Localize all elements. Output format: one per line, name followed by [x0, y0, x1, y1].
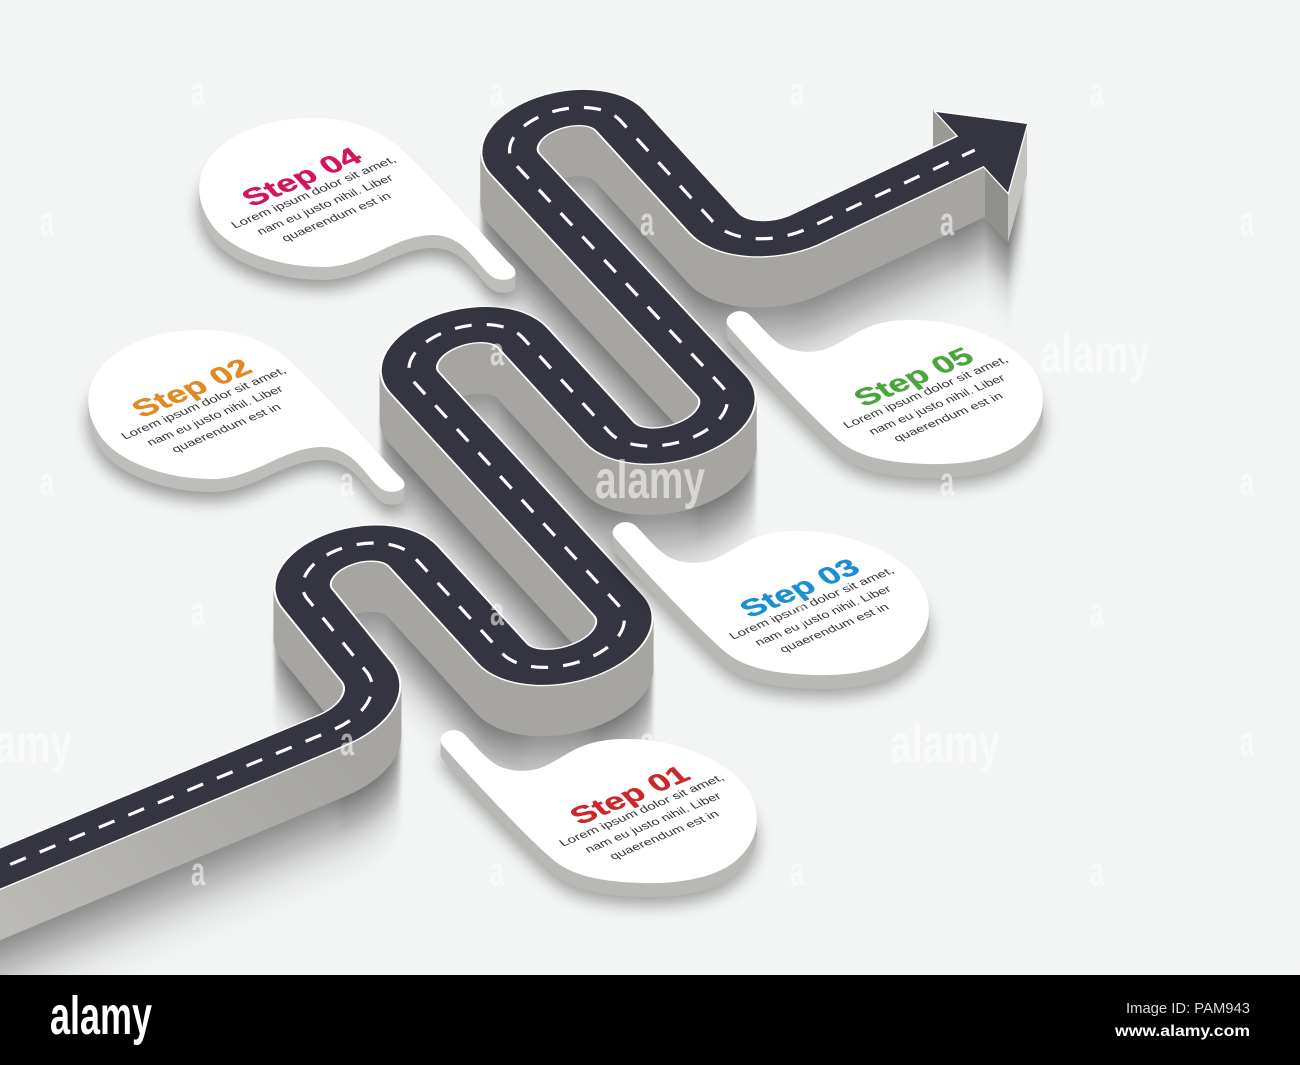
callout: step 03: Lorem ipsum dolor sit amet, — [726, 565, 897, 642]
watermarks: a — [640, 200, 654, 244]
callout: step 04 — [199, 118, 515, 302]
callout: step 03: nam eu justo nihil. Liber — [752, 583, 894, 648]
watermarks: a — [40, 200, 54, 244]
watermarks: a — [790, 70, 804, 114]
watermarks: a — [191, 330, 205, 374]
watermarks: a — [490, 850, 504, 894]
callout: step 01: quaerendum est in — [606, 808, 722, 862]
watermarks: a — [1240, 200, 1254, 244]
callout: step 01: Step 01 — [563, 760, 696, 830]
watermarks: a — [1090, 70, 1104, 114]
callout: step 02: Step 02 — [125, 353, 258, 423]
callout: step 02: quaerendum est in — [168, 401, 284, 455]
callout: step 02: Lorem ipsum dolor sit amet, — [118, 365, 289, 442]
callout: step 05: quaerendum est in — [890, 390, 1006, 444]
watermarks: a — [490, 70, 504, 114]
watermarks — [0, 70, 1254, 894]
callout: step 05: Step 05 — [847, 342, 980, 412]
callout: step 04: Step 04 — [235, 142, 368, 212]
watermarks: a — [1240, 460, 1254, 504]
footer bar — [0, 975, 1300, 1065]
watermarks: a — [490, 330, 504, 374]
watermarks: a — [1090, 590, 1104, 634]
callout: step 05: Lorem ipsum dolor sit amet, — [840, 354, 1011, 431]
watermarks: alamy — [595, 450, 705, 510]
callout: step 05 — [727, 311, 1043, 486]
callout: step 01: nam eu justo nihil. Liber — [582, 790, 724, 855]
callout: step 02 — [88, 330, 404, 514]
callout: step 04: quaerendum est in — [278, 190, 394, 244]
watermarks: a — [191, 850, 205, 894]
watermarks: a — [790, 590, 804, 634]
arrow head walls — [933, 109, 1027, 242]
callout: step 04: Lorem ipsum dolor sit amet, — [228, 154, 399, 231]
callout: step 01: Lorem ipsum dolor sit amet, — [556, 772, 727, 849]
watermarks: a — [191, 70, 205, 114]
callout: step 04: nam eu justo nihil. Liber — [254, 172, 396, 237]
watermarks: a — [940, 460, 954, 504]
watermarks: a — [340, 720, 354, 764]
footer logo: alamy — [50, 986, 152, 1046]
website: www.alamy.com — [1114, 1023, 1250, 1040]
callout: step 03 — [613, 522, 929, 697]
watermarks: a — [640, 720, 654, 764]
watermarks: a — [1090, 850, 1104, 894]
watermarks: a — [40, 460, 54, 504]
watermarks: a — [191, 590, 205, 634]
watermarks: alamy — [890, 714, 1000, 774]
watermarks: a — [1240, 720, 1254, 764]
callout: step 03: quaerendum est in — [776, 601, 892, 655]
callout: step 01 — [441, 730, 757, 905]
watermarks: a — [940, 200, 954, 244]
watermarks: a — [490, 590, 504, 634]
callout: step 03: Step 03 — [733, 553, 866, 623]
watermarks: a — [790, 850, 804, 894]
watermarks: a — [340, 460, 354, 504]
image id: Image ID: PAM943 — [1126, 1000, 1250, 1017]
watermarks: alamy — [1040, 324, 1150, 384]
callout: step 05: nam eu justo nihil. Liber — [866, 372, 1008, 437]
callout: step 02: nam eu justo nihil. Liber — [144, 383, 286, 448]
